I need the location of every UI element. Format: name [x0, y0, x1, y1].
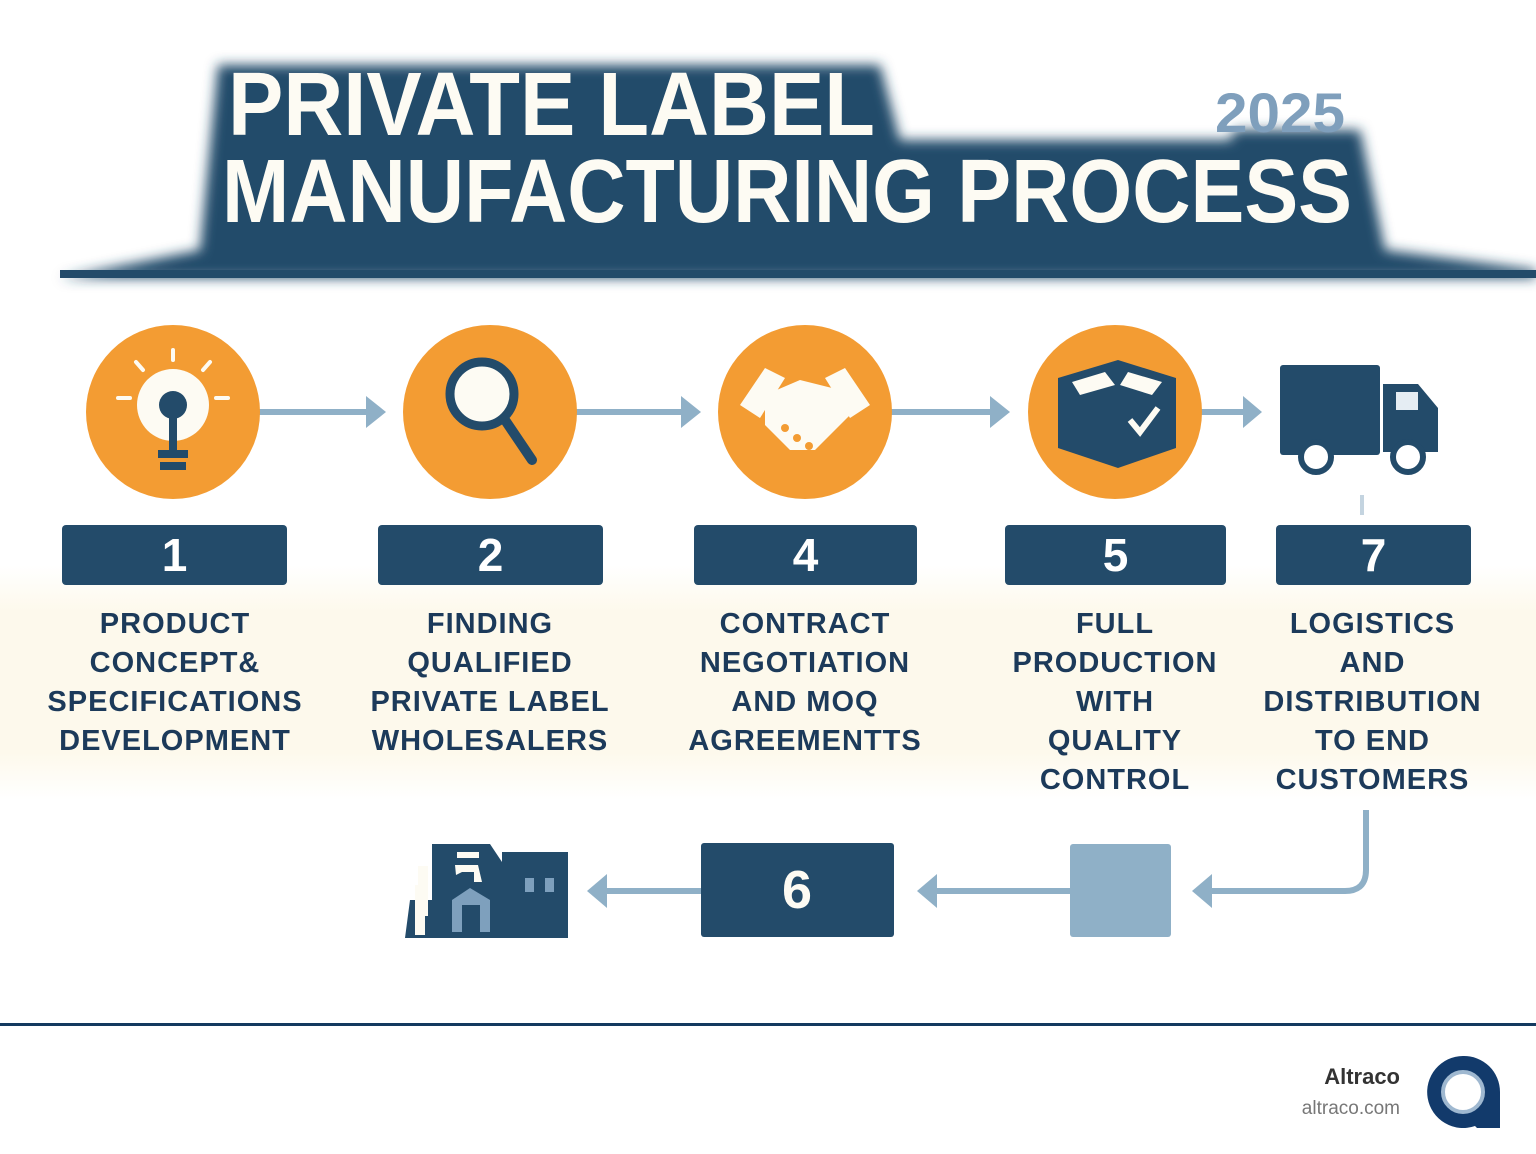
- icon: handshake: [718, 325, 892, 499]
- text: PRODUCT: [100, 608, 250, 640]
- text: 5: [1103, 529, 1128, 581]
- text: PRODUCTION: [1013, 647, 1217, 679]
- text: TO END: [1315, 725, 1430, 757]
- text: DEVELOPMENT: [59, 725, 291, 757]
- text: QUALITY: [1048, 725, 1182, 757]
- title: [222, 55, 1352, 242]
- year: 2025: [1215, 81, 1345, 144]
- text: SPECIFICATIONS: [47, 686, 303, 718]
- text: FINDING: [427, 608, 553, 640]
- icon: lightbulb: [86, 325, 260, 499]
- text: LOGISTICS: [1290, 608, 1455, 640]
- text: AND MOQ: [731, 686, 879, 718]
- text: DISTRIBUTION: [1263, 686, 1482, 718]
- brand text: Altraco: [1324, 1064, 1400, 1089]
- text: 1: [162, 529, 187, 581]
- process icons and arrows: [86, 325, 1438, 515]
- header banner: [60, 54, 1536, 288]
- text: AND: [1340, 647, 1405, 679]
- step 4: [688, 525, 922, 757]
- title: MANUFACTURING PROCESS: [222, 142, 1352, 242]
- step 1: [47, 525, 303, 757]
- text: QUALIFIED: [407, 647, 573, 679]
- cream band: [0, 565, 1536, 800]
- logo: [1427, 1056, 1500, 1128]
- text: NEGOTIATION: [700, 647, 910, 679]
- box 6: 6: [782, 860, 812, 920]
- text: CONCEPT&: [90, 647, 260, 679]
- connector arrow: [1210, 810, 1366, 891]
- box 6: [701, 843, 894, 937]
- text: WHOLESALERS: [372, 725, 608, 757]
- icon: magnifier: [403, 325, 577, 499]
- step 5: [1005, 525, 1226, 796]
- text: AGREEMENTTS: [688, 725, 922, 757]
- brand text: [1302, 1064, 1400, 1119]
- icon: truck: [1280, 365, 1438, 515]
- text: FULL: [1076, 608, 1154, 640]
- text: CUSTOMERS: [1276, 764, 1469, 796]
- step 2: [370, 525, 610, 757]
- footer line: [0, 1023, 1536, 1026]
- icon: box: [1028, 325, 1202, 499]
- text: 4: [793, 529, 818, 581]
- text: WITH: [1076, 686, 1154, 718]
- text: 2: [478, 529, 503, 581]
- title: PRIVATE LABEL: [228, 55, 875, 155]
- arrows: [258, 396, 1262, 428]
- text: PRIVATE LABEL: [370, 686, 610, 718]
- text: CONTROL: [1040, 764, 1190, 796]
- text: CONTRACT: [720, 608, 890, 640]
- light box: [1070, 844, 1171, 937]
- brand text: altraco.com: [1302, 1098, 1400, 1119]
- bottom flow: [405, 810, 1369, 938]
- icon: factory: [405, 844, 568, 938]
- step 7: [1263, 525, 1482, 796]
- text: 7: [1361, 529, 1386, 581]
